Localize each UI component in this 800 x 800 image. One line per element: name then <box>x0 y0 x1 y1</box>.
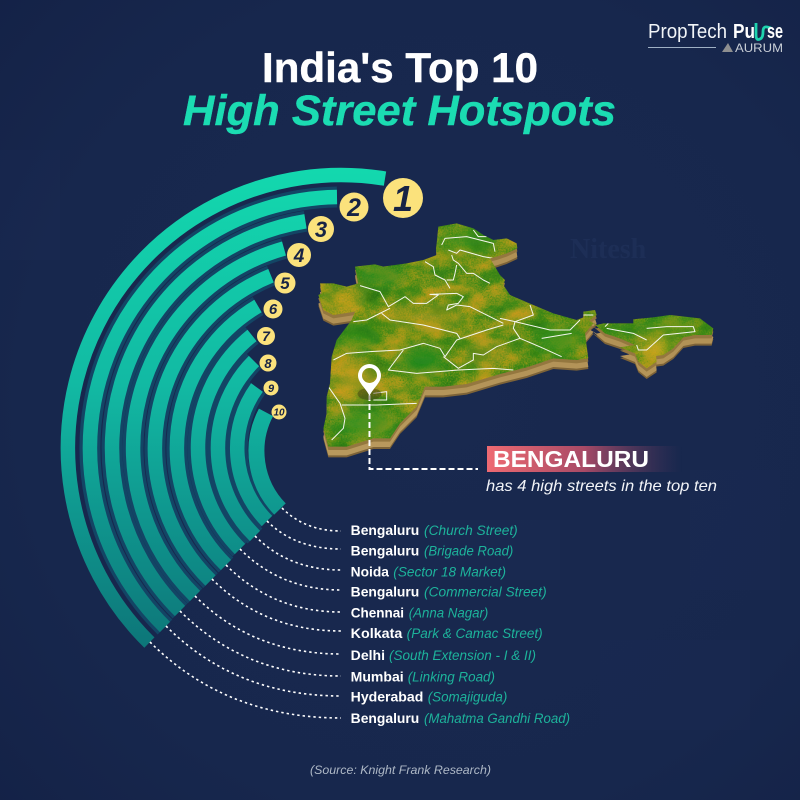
ranked list of high streets: (South Extension - I & II) <box>389 648 536 663</box>
ranked list of high streets: (Church Street) <box>424 523 518 538</box>
ranked list of high streets: (Linking Road) <box>408 670 495 684</box>
ranked list of high streets <box>351 523 570 726</box>
callout: Bengaluru: has 4 high streets in the top ten <box>486 478 717 495</box>
rank number badges: 7 <box>262 328 271 344</box>
rank number badges: 1 <box>393 178 413 219</box>
logo: PropTech Pulse Aurum: Pu <box>733 21 755 43</box>
logo: PropTech Pulse Aurum: PropTech <box>648 21 727 43</box>
logo: PropTech Pulse Aurum <box>648 21 783 55</box>
source note: (Source: Knight Frank Research) <box>310 763 491 777</box>
ranked list of high streets: Chennai <box>351 606 404 620</box>
ranked list of high streets: (Anna Nagar) <box>409 606 488 620</box>
rank number badges: 9 <box>268 383 275 395</box>
ranked list of high streets: Hyderabad <box>351 690 423 704</box>
title: India's Top 10 <box>262 44 538 91</box>
title <box>183 44 616 135</box>
ranked list of high streets: (Sector 18 Market) <box>393 564 506 580</box>
dashed leader from pin to Bengaluru label <box>370 395 478 469</box>
logo: PropTech Pulse Aurum: AURUM <box>735 41 783 55</box>
ranked list of high streets: Bengaluru <box>351 523 419 538</box>
callout: Bengaluru: BENGALURU <box>493 446 649 472</box>
ranked concentric arc chart <box>68 175 385 643</box>
ranked list of high streets: (Park & Camac Street) <box>407 626 543 641</box>
rank number badges: 5 <box>280 274 290 293</box>
dotted connectors from arcs to list <box>150 508 341 718</box>
callout: Bengaluru <box>486 446 717 495</box>
india map <box>318 223 713 457</box>
ranked list of high streets: (Somajiguda) <box>428 690 507 704</box>
rank number badges: 3 <box>315 217 327 242</box>
title: High Street Hotspots <box>183 87 616 135</box>
ranked list of high streets: Delhi <box>351 648 385 663</box>
ranked list of high streets: (Commercial Street) <box>424 584 547 600</box>
rank number badges: 10 <box>273 408 285 418</box>
ranked list of high streets: (Mahatma Gandhi Road) <box>424 711 570 726</box>
ranked list of high streets: Mumbai <box>351 670 404 684</box>
ranked list of high streets: Bengaluru <box>351 584 419 600</box>
rank number badges: 4 <box>293 246 305 267</box>
ranked list of high streets: Bengaluru <box>351 711 419 726</box>
text: Nitesh <box>570 234 647 265</box>
rank number badges <box>257 178 423 420</box>
ranked list of high streets: Kolkata <box>351 626 403 641</box>
ranked list of high streets: Noida <box>351 564 389 580</box>
rank number badges: 6 <box>269 301 278 318</box>
logo: PropTech Pulse Aurum: se <box>767 21 783 43</box>
icon: location pin <box>358 364 382 400</box>
ranked list of high streets: Bengaluru <box>351 544 419 558</box>
rank number badges: 2 <box>346 194 361 222</box>
rank number badges: 8 <box>264 356 272 371</box>
ranked list of high streets: (Brigade Road) <box>424 544 513 558</box>
